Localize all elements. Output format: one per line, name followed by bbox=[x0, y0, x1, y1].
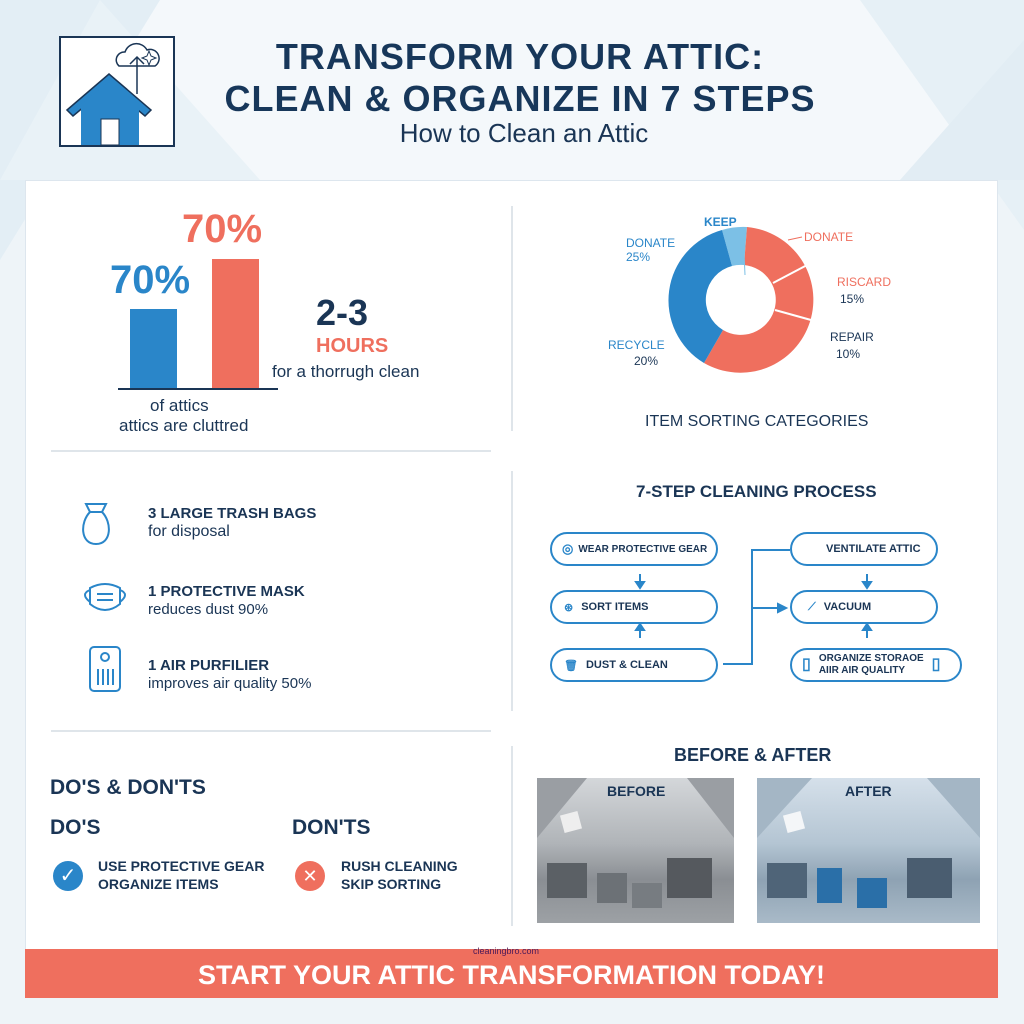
step: sort items: ⊛ bbox=[564, 602, 573, 614]
step: organize storage bbox=[790, 648, 962, 682]
donut labels: 10% bbox=[836, 347, 860, 361]
step: ventilate: VENTILATE ATTIC bbox=[826, 543, 921, 555]
supplies list: 1 PROTECTIVE MASK bbox=[148, 583, 305, 600]
donut labels bbox=[608, 215, 891, 368]
step: vacuum: VACUUM bbox=[824, 601, 871, 613]
do's and don'ts bbox=[50, 776, 458, 892]
hours stat bbox=[272, 292, 419, 381]
hours stat: HOURS bbox=[316, 335, 388, 357]
process heading: 7-STEP CLEANING PROCESS bbox=[636, 482, 877, 501]
supplies list bbox=[82, 503, 316, 692]
donut labels: KEEP bbox=[704, 215, 737, 229]
step: vacuum bbox=[790, 590, 938, 624]
title: TRANSFORM YOUR ATTIC: bbox=[276, 36, 764, 77]
bar chart stat: 70% bbox=[110, 258, 190, 302]
bar chart stat: attics are cluttred bbox=[119, 416, 248, 435]
bottom banner: START YOUR ATTIC TRANSFORMATION TODAY! bbox=[198, 960, 825, 990]
before image bbox=[537, 778, 734, 923]
before & after heading: BEFORE & AFTER bbox=[674, 745, 831, 765]
step: dust & clean: 🗑 bbox=[564, 660, 578, 672]
step: wear protective gear bbox=[550, 532, 718, 566]
supplies list: 3 LARGE TRASH BAGS bbox=[148, 505, 316, 522]
step: ventilate bbox=[790, 532, 938, 566]
icon: trash bag bbox=[82, 503, 110, 545]
flowchart bbox=[550, 532, 962, 682]
do's and don'ts: RUSH CLEANING bbox=[341, 858, 458, 874]
donut labels: 20% bbox=[634, 354, 658, 368]
chart caption: ITEM SORTING CATEGORIES bbox=[645, 413, 868, 430]
icon: check: ✓ bbox=[60, 865, 76, 887]
main panel bbox=[25, 180, 998, 998]
bottom banner bbox=[25, 949, 998, 998]
step: wear protective gear: WEAR PROTECTIVE GEAR bbox=[578, 544, 707, 554]
bar chart stat bbox=[110, 207, 278, 435]
donut labels: RISCARD bbox=[837, 275, 891, 289]
after image bbox=[757, 778, 980, 923]
do's and don'ts: DO'S & DON'TS bbox=[50, 776, 206, 799]
supplies list: improves air quality 50% bbox=[148, 675, 311, 692]
logo icon: house with cloud bbox=[59, 36, 175, 147]
icon: mask bbox=[84, 583, 126, 611]
step: sort items bbox=[550, 590, 718, 624]
step: organize storage: ORGANIZE STORAOE bbox=[819, 653, 924, 664]
supplies list: reduces dust 90% bbox=[148, 601, 268, 618]
before image: BEFORE bbox=[607, 783, 665, 799]
step: organize storage: AIIR AIR QUALITY bbox=[819, 665, 905, 676]
supplies list: 1 AIR PURFILIER bbox=[148, 657, 269, 674]
step: wear protective gear: ◎ bbox=[562, 541, 573, 556]
donut chart bbox=[668, 226, 814, 373]
step: vacuum: ⟋ bbox=[808, 600, 816, 612]
donut labels: DONATE bbox=[804, 230, 853, 244]
donut labels: RECYCLE bbox=[608, 338, 665, 352]
donut labels: REPAIR bbox=[830, 330, 874, 344]
donut labels: 25% bbox=[626, 250, 650, 264]
bar chart stat: 70% bbox=[182, 207, 262, 251]
donut labels: DONATE bbox=[626, 236, 675, 250]
icon: check bbox=[53, 861, 83, 891]
source text: cleaningbro.com bbox=[473, 946, 539, 956]
do's and don'ts: USE PROTECTIVE GEAR bbox=[98, 858, 264, 874]
step: dust & clean: DUST & CLEAN bbox=[586, 659, 668, 671]
title bbox=[224, 36, 816, 119]
step: organize storage: ▯ bbox=[932, 656, 940, 673]
step: dust & clean bbox=[550, 648, 718, 682]
do's and don'ts: ORGANIZE ITEMS bbox=[98, 876, 219, 892]
after image: AFTER bbox=[845, 783, 892, 799]
hours stat: 2-3 bbox=[316, 292, 368, 333]
bar chart stat: of attics bbox=[150, 396, 209, 415]
icon: air purifier bbox=[89, 646, 121, 692]
do's and don'ts: SKIP SORTING bbox=[341, 876, 441, 892]
supplies list: for disposal bbox=[148, 523, 230, 540]
hours stat: for a thorrugh clean bbox=[272, 362, 419, 381]
subtitle: How to Clean an Attic bbox=[400, 118, 648, 148]
title: CLEAN & ORGANIZE IN 7 STEPS bbox=[224, 78, 816, 119]
step: sort items: SORT ITEMS bbox=[581, 601, 648, 613]
donut labels: 15% bbox=[840, 292, 864, 306]
icon: cross bbox=[295, 861, 325, 891]
step: organize storage: ▯ bbox=[802, 656, 811, 673]
icon: cross: ✕ bbox=[302, 866, 318, 886]
do's and don'ts: DO'S bbox=[50, 816, 101, 839]
do's and don'ts: DON'TS bbox=[292, 816, 370, 839]
